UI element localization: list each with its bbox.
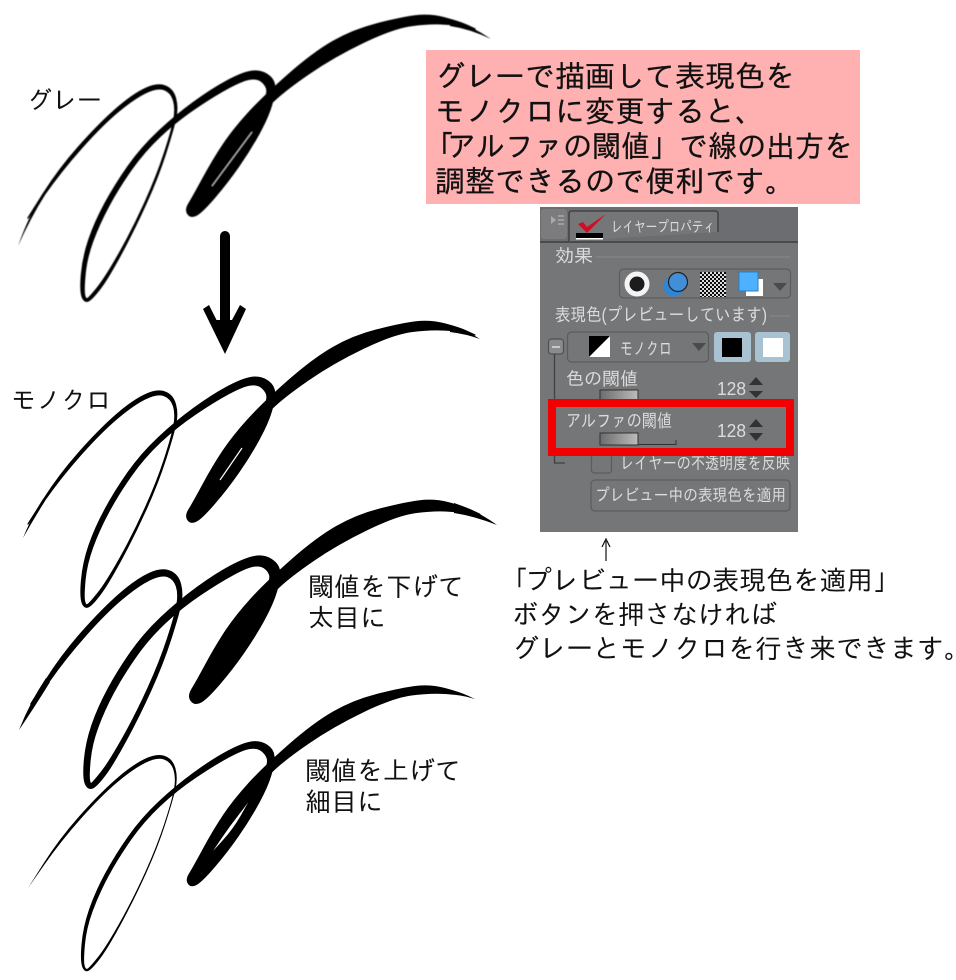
alpha threshold row: 128	[717, 421, 746, 441]
callout: モノクロに変更すると、	[435, 96, 765, 129]
raised threshold brush stroke	[28, 685, 475, 971]
monochrome brush stroke	[23, 321, 480, 607]
panel: layer properties	[540, 207, 798, 532]
alpha threshold row	[566, 411, 763, 445]
note: preview button: 「	[501, 566, 528, 596]
apply preview button	[591, 480, 790, 511]
note: lower threshold: 閾値を下げて	[308, 572, 464, 602]
gray brush stroke	[18, 15, 491, 301]
callout: 調整できるので便利です。	[435, 166, 795, 199]
note: lower threshold: 太目に	[308, 603, 386, 633]
section: expression colour	[548, 305, 790, 463]
alpha threshold row: アルファの閾値	[566, 411, 672, 431]
highlight: alpha threshold	[552, 403, 790, 452]
callout: グレーで描画して表現色を	[435, 61, 795, 94]
section: effect: 効果	[555, 246, 593, 266]
note: preview button: プレビュー中の表現色を適用」	[525, 566, 900, 596]
note: raise threshold: 細目に	[305, 787, 383, 817]
tab strip: レイヤープロパティ	[611, 219, 715, 236]
callout: アルファの閾値」で線の出方を	[447, 131, 853, 164]
section: effect	[555, 246, 790, 298]
colour threshold row: 色の閾値	[566, 369, 638, 389]
note: raise threshold: 閾値を上げて	[305, 756, 461, 786]
tab strip	[540, 207, 798, 242]
layer opacity checkbox: レイヤーの不透明度を反映	[620, 454, 790, 473]
note: preview button: ボタンを押さなければ	[512, 600, 777, 630]
note: raise threshold	[305, 756, 461, 817]
colour threshold row: 128	[717, 379, 746, 399]
layer opacity checkbox	[592, 452, 790, 473]
label: gray: グレー	[27, 87, 102, 115]
lowered threshold brush stroke	[19, 501, 497, 787]
apply preview button: プレビュー中の表現色を適用	[595, 486, 786, 505]
arrow: gray to monochrome	[203, 231, 246, 354]
callout: 「	[424, 131, 454, 164]
section: expression colour: 表現色(プレビューしています)	[555, 305, 767, 325]
section: expression colour: モノクロ	[620, 339, 672, 359]
note: lower threshold	[308, 572, 464, 633]
label: monochrome: モノクロ	[11, 387, 111, 415]
arrow: pointer to button	[602, 539, 610, 561]
callout	[424, 50, 860, 204]
note: preview button	[501, 566, 956, 664]
colour threshold row	[566, 369, 763, 402]
